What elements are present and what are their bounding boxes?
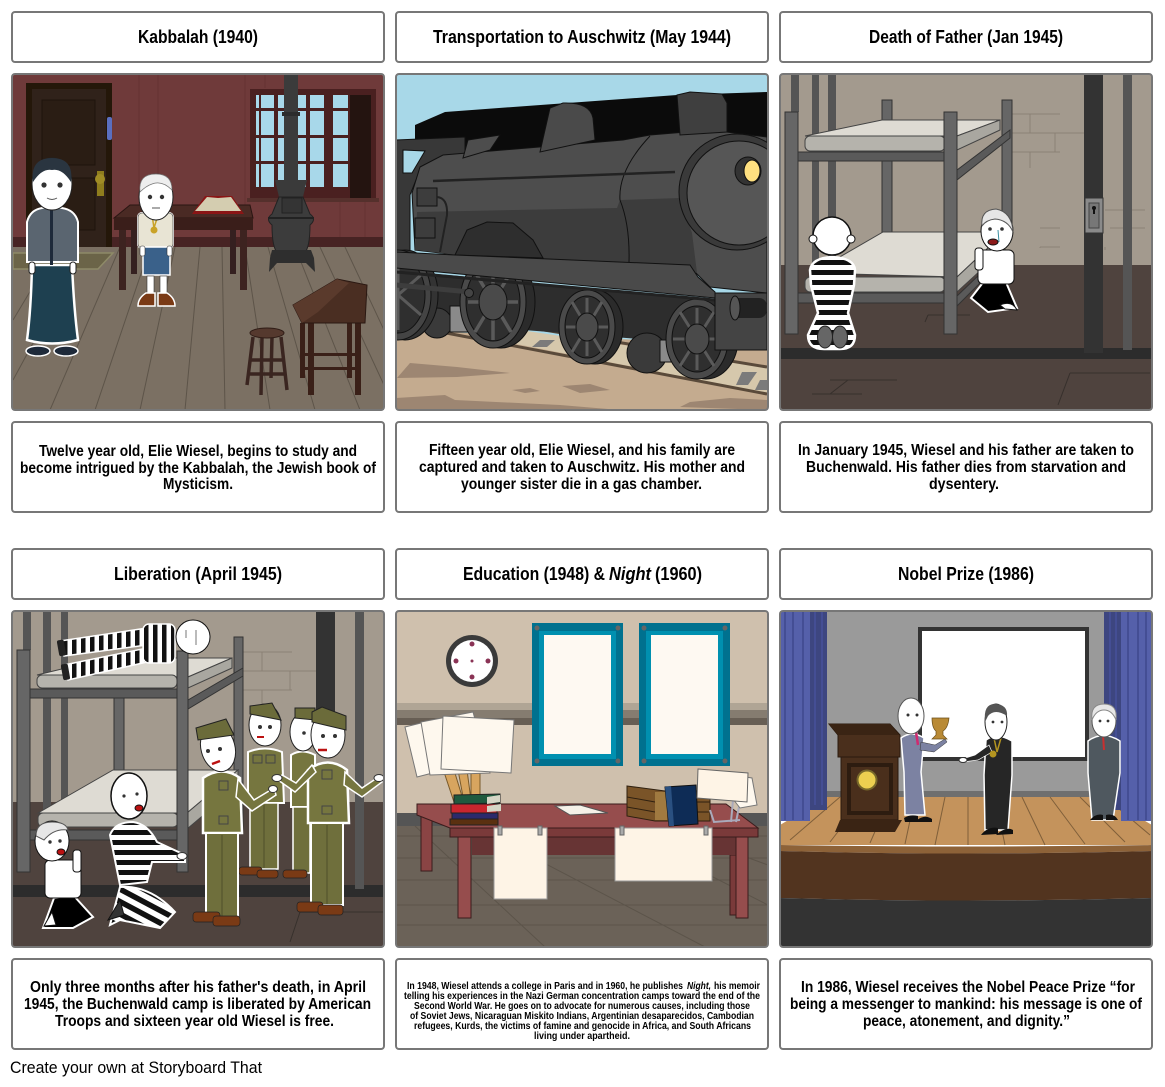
caption: Auschwitz: Fifteen year old, Elie Wiesel, and his family are (429, 442, 735, 459)
heading: Education and Night: Education (1948) & (463, 564, 605, 584)
caption: Auschwitz: younger sister die in a gas chamber. (461, 476, 702, 493)
protest signs right (697, 769, 757, 822)
panel: Kabbalah (1940) (12, 12, 384, 512)
scene: barracks (780, 74, 1152, 410)
left curtain (780, 612, 827, 821)
caption: Death of Father (780, 422, 1152, 512)
heading: Death of Father: Death of Father (Jan 1945) (869, 27, 1063, 47)
paper on table (555, 805, 608, 815)
scene: steam locomotive (397, 75, 767, 409)
panel: Death of Father (Jan 1945) (780, 12, 1152, 512)
caption: Education: Night, (687, 981, 711, 992)
heading: Liberation (12, 549, 384, 599)
caption: Kabbalah: Mysticism. (163, 476, 233, 493)
caption: Education: living under apartheid. (534, 1031, 630, 1042)
heading: Education and Night: (1960) (655, 564, 702, 584)
heading: Kabbalah (1940) (12, 12, 384, 62)
character: crying Wiesel kneeling (971, 209, 1017, 312)
scene: room with mother and boy (12, 74, 384, 410)
caption: Nobel Prize: peace, atonement, and dignity.” (863, 1013, 1070, 1030)
caption: Education: In 1948, Wiesel attends a college in Paris and in 1960, he publishes (407, 981, 683, 992)
driving wheels (365, 250, 738, 379)
character: presenter with trophy (898, 698, 949, 822)
rug (13, 253, 113, 269)
scene: stage (780, 611, 1152, 947)
right curtain (1104, 612, 1152, 821)
caption: Auschwitz (396, 422, 768, 512)
caption: Education: Second World War. He goes on to advocate for numerous causes, including those (414, 1001, 750, 1012)
icon: lectern desk (293, 279, 367, 395)
caption: Education: his memoir (714, 981, 760, 992)
caption: Death of Father: Buchenwald. His father dies from starvation and (806, 459, 1126, 476)
book stack (450, 794, 501, 825)
scene: classroom (396, 611, 768, 947)
icon: table with book (114, 196, 253, 290)
panel: Education (1948) and Night (1960) (396, 549, 768, 1049)
icon: stool (247, 328, 287, 395)
poster right (639, 623, 730, 766)
poster left (532, 623, 623, 766)
heading: Kabbalah (1940): Kabbalah (1940) (138, 27, 258, 47)
icon: door (26, 83, 112, 247)
caption: Auschwitz: captured and taken to Auschwitz. His mother and (419, 459, 745, 476)
heading: Nobel Prize: Nobel Prize (1986) (898, 564, 1034, 584)
character: soldier back right (283, 708, 316, 878)
heading: Education and Night: Night (609, 564, 652, 584)
train tender (415, 92, 767, 151)
caption: Education: refugees, Kurds, the victims of famine and genocide in Africa, and South Africans (414, 1021, 751, 1032)
scene: liberation in barracks (12, 611, 384, 947)
character: man in grey suit (1088, 704, 1120, 820)
heading: Liberation: Liberation (April 1945) (114, 564, 282, 584)
character: soldier front left (193, 719, 278, 926)
character: bald man kneeling (108, 773, 187, 928)
panel: Transportation to Auschwitz (May 1944) (395, 11, 769, 513)
icon: podium (829, 724, 902, 832)
character: boy with star (138, 174, 175, 306)
heading: Transportation to Auschwitz: Transportation to Auschwitz (May 1944) (433, 27, 731, 47)
heading: Death of Father (780, 12, 1152, 62)
caption: Education (396, 959, 768, 1049)
character: Wiesel kneeling (35, 821, 93, 928)
heading: Education and Night (396, 549, 768, 599)
cab (397, 138, 464, 250)
character: prisoner from behind (808, 217, 855, 349)
column and lock (1084, 75, 1132, 353)
caption: Liberation: Only three months after his father's death, in April (30, 979, 366, 996)
protest signs left (405, 712, 514, 808)
footer credit: Create your own at Storyboard That (10, 1058, 262, 1077)
character: mother (26, 158, 78, 356)
hanging papers (494, 826, 712, 899)
caption: Liberation: 1945, the Buchenwald camp is liberated by American (24, 996, 371, 1013)
undercarriage (434, 274, 692, 340)
column and pipe (316, 612, 364, 889)
panel: Nobel Prize (1986) (780, 549, 1152, 1049)
caption: Death of Father: dysentery. (929, 476, 999, 493)
caption: Kabbalah: become intrigued by the Kabbalah, the Jewish book of (20, 460, 377, 477)
caption: Education: telling his experiences in the Nazi German concentration camps toward the end of the (404, 991, 760, 1002)
caption: Nobel Prize (780, 959, 1152, 1049)
character: soldier front right (272, 707, 384, 915)
heading: Transportation to Auschwitz (396, 12, 768, 62)
bunk bed (785, 75, 1012, 334)
wooden trays and blue book (627, 785, 710, 826)
caption: Kabbalah (12, 422, 384, 512)
character: man lying on top bunk (57, 620, 210, 680)
panel: Liberation (April 1945) (12, 549, 384, 1049)
table (417, 804, 758, 918)
running board (396, 252, 767, 350)
character: soldier back left (239, 703, 284, 878)
icon: wall clock (446, 635, 498, 687)
caption: Liberation: Troops and sixteen year old Wiesel is free. (55, 1013, 334, 1030)
projection screen (920, 629, 1087, 759)
caption: Kabbalah: Twelve year old, Elie Wiesel, begins to study and (39, 443, 357, 460)
bunk bed (17, 612, 243, 872)
caption: Liberation (12, 959, 384, 1049)
character: Wiesel receiving (959, 704, 1013, 835)
caption: Education: of Soviet Jews, Nicaraguan Miskito Indians, Argentinian desaparecidos, Cambodian (410, 1011, 754, 1022)
boiler (412, 92, 795, 293)
small wheels (422, 306, 680, 373)
icon: window (247, 89, 379, 202)
icon: stove and pipe (268, 75, 315, 272)
heading: Nobel Prize (780, 549, 1152, 599)
